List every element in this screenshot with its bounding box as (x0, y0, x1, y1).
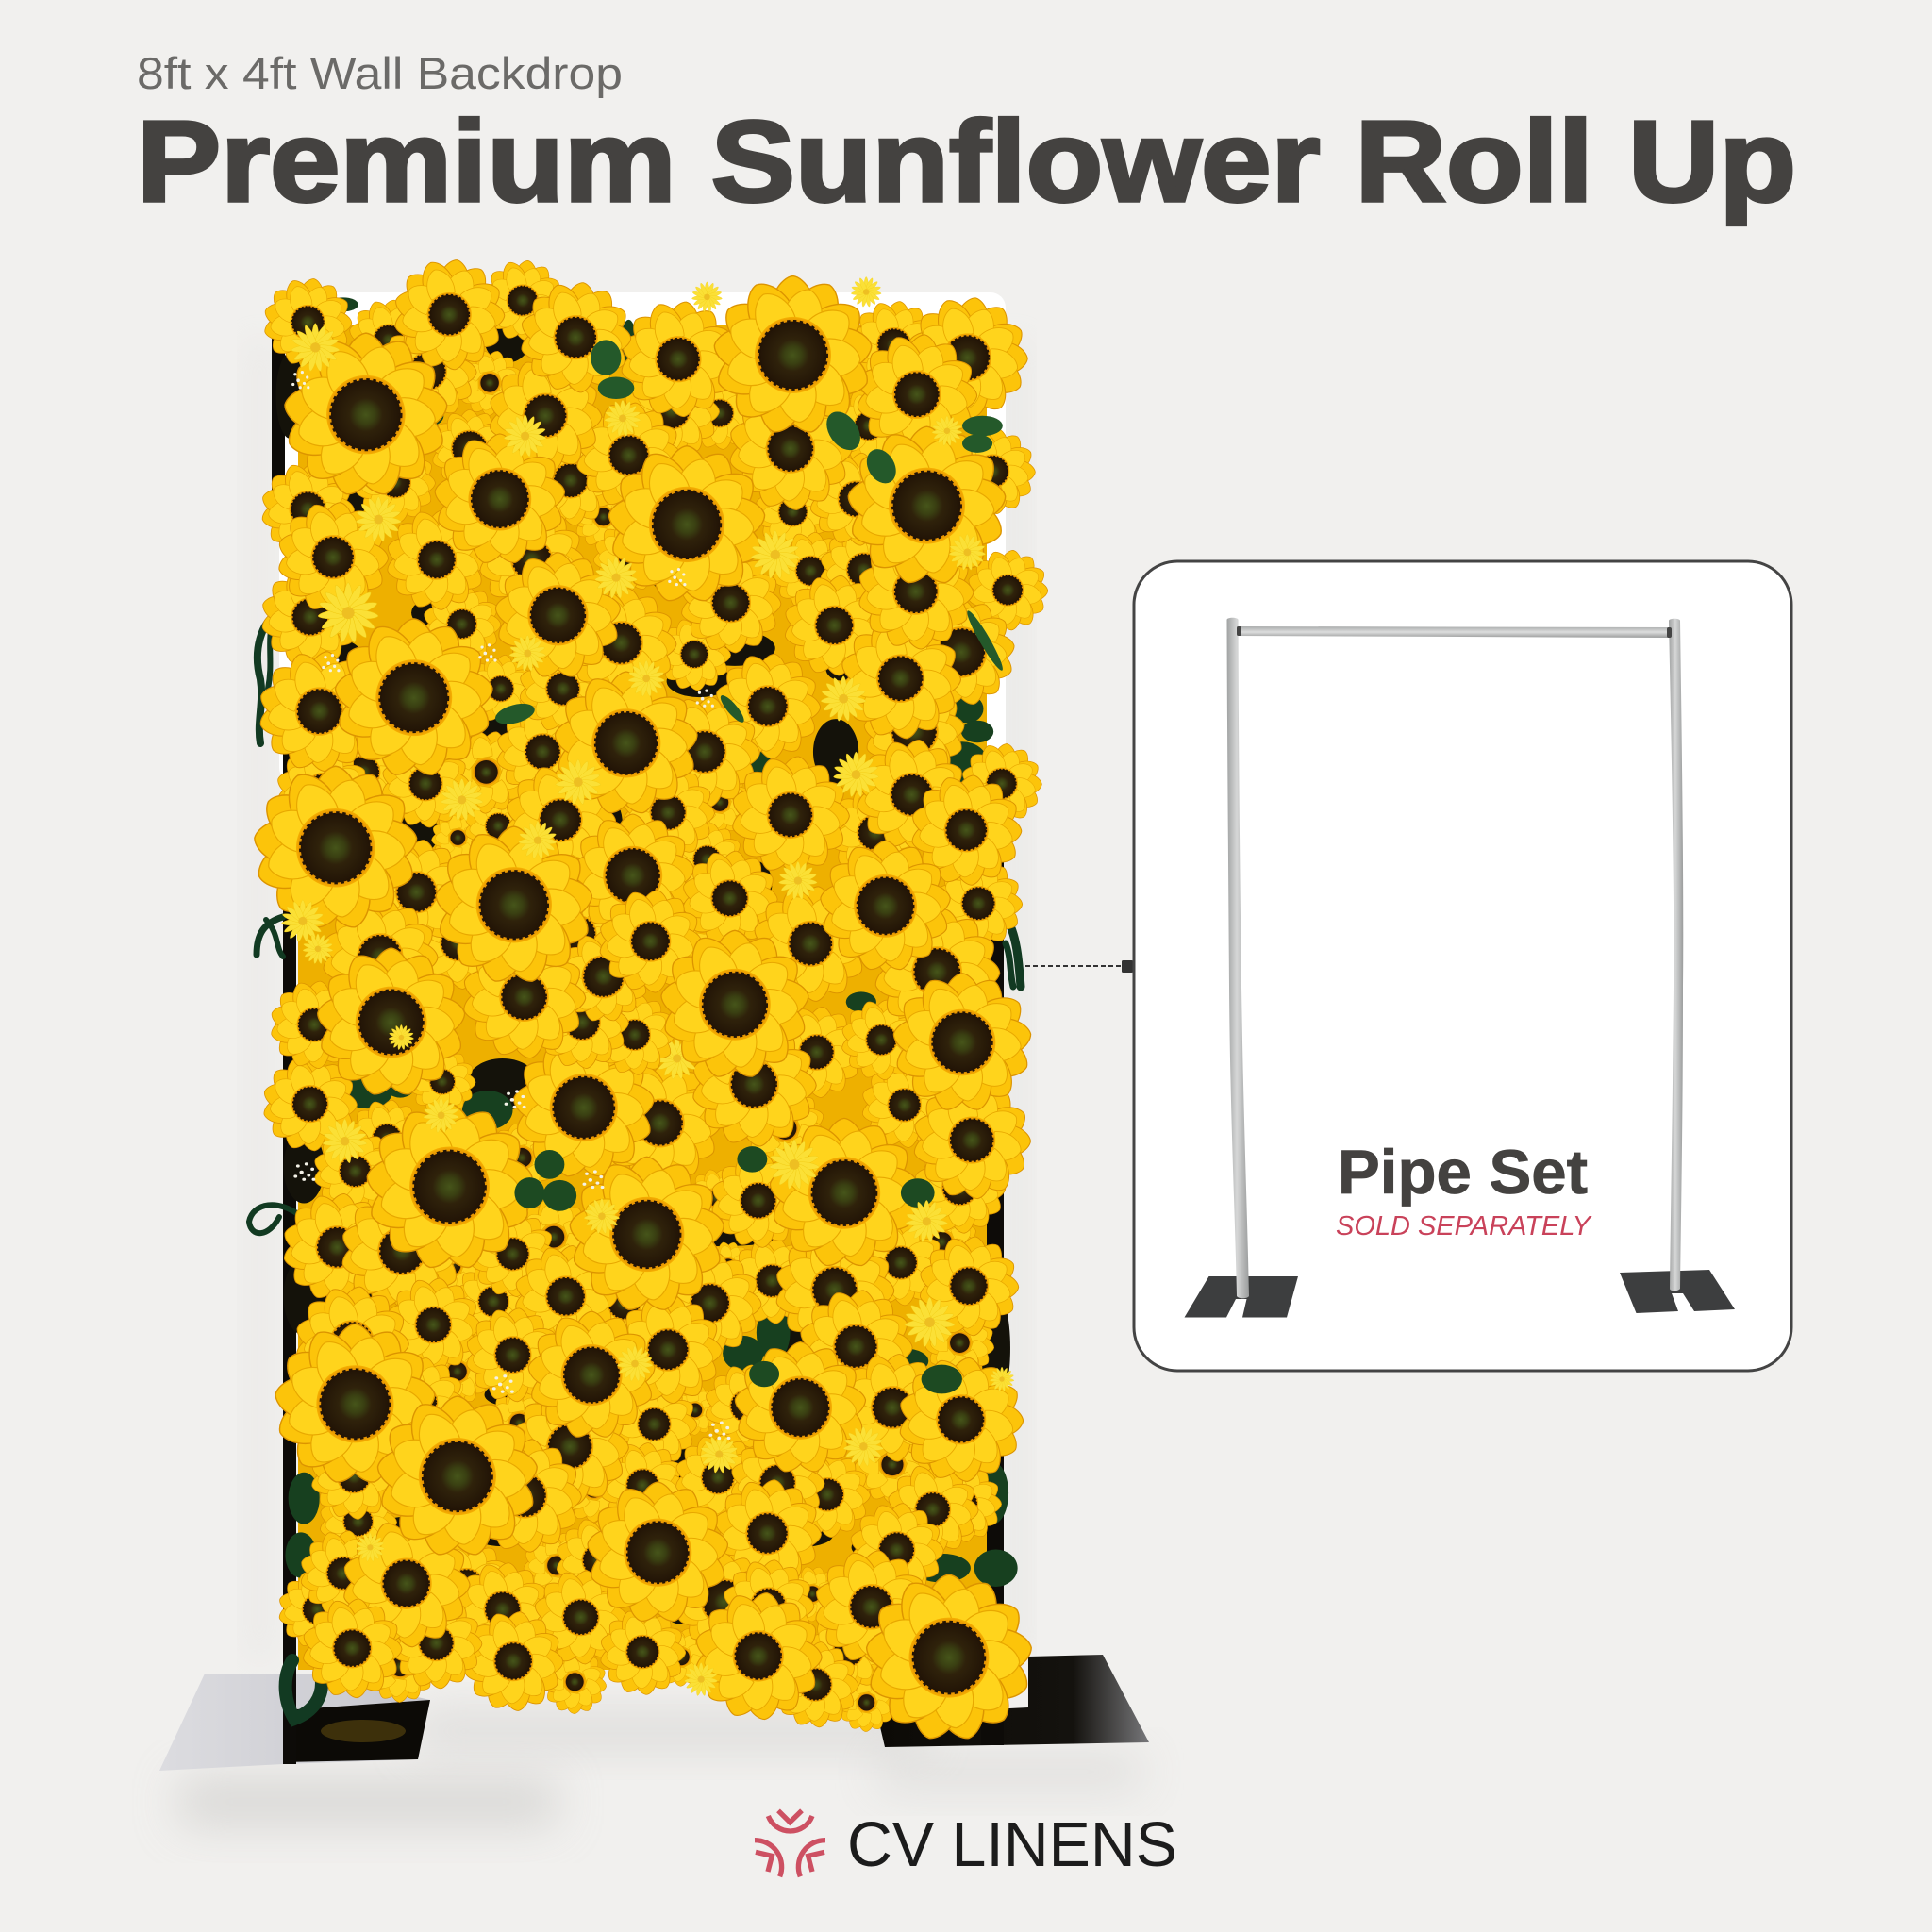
sunflowers: upper half (249, 251, 1055, 1114)
upper small blooms (253, 255, 1055, 1087)
left base reflection (283, 1700, 430, 1762)
product: sunflower wall backdrop (159, 251, 1149, 1825)
crossbar (1237, 626, 1671, 638)
pipe set frame illustration (1185, 618, 1735, 1317)
lower small blooms (255, 1000, 1013, 1740)
connector: dashed line to pipe set (1025, 960, 1133, 973)
right base plate (877, 1655, 1149, 1747)
heading: subtitle: 8ft x 4ft Wall Backdrop (137, 48, 623, 98)
lower large blooms (273, 1036, 1035, 1743)
lower dark leaves (285, 1071, 1018, 1587)
lower daisies (323, 1038, 1014, 1696)
sunflowers: lower half (255, 1000, 1041, 1743)
left base (1185, 1276, 1298, 1317)
upper daisies (281, 276, 986, 1050)
left base reflected glow (321, 1720, 406, 1742)
baby breath sprigs lower (293, 1090, 730, 1440)
right base (1620, 1270, 1735, 1313)
soft shadows (179, 340, 1141, 1825)
flower wall underlay (298, 325, 987, 1670)
upper deep leaves (328, 297, 993, 1012)
upper top leaves (493, 340, 1007, 728)
lower dark gaps (284, 1058, 1010, 1624)
left upright (1226, 618, 1249, 1298)
panel card (1134, 561, 1791, 1371)
logo: CV Linens (755, 1809, 1177, 1880)
lower top leaves (514, 1146, 962, 1393)
upper medium blooms (249, 251, 1038, 1069)
heading: main title: Premium Sunflower Roll Up (137, 97, 1796, 225)
logo mark (755, 1810, 825, 1876)
frame white fabric (279, 292, 1006, 783)
right upright (1669, 619, 1683, 1291)
lower medium blooms (275, 1013, 1041, 1730)
ribbons (249, 611, 1021, 1719)
logo wordmark: CV LINENS (847, 1809, 1177, 1880)
upper large blooms (251, 275, 1034, 1114)
panel note: sold separately: SOLD SEPARATELY (1336, 1211, 1593, 1241)
panel: pipe set (1134, 561, 1791, 1371)
panel label: Pipe Set: Pipe Set (1338, 1137, 1588, 1207)
upper dark gaps (275, 317, 858, 906)
baby breath sprigs upper (291, 371, 714, 708)
frame black bars (272, 311, 1004, 1764)
crossbar brackets (1237, 626, 1672, 638)
left base plate (159, 1674, 430, 1771)
